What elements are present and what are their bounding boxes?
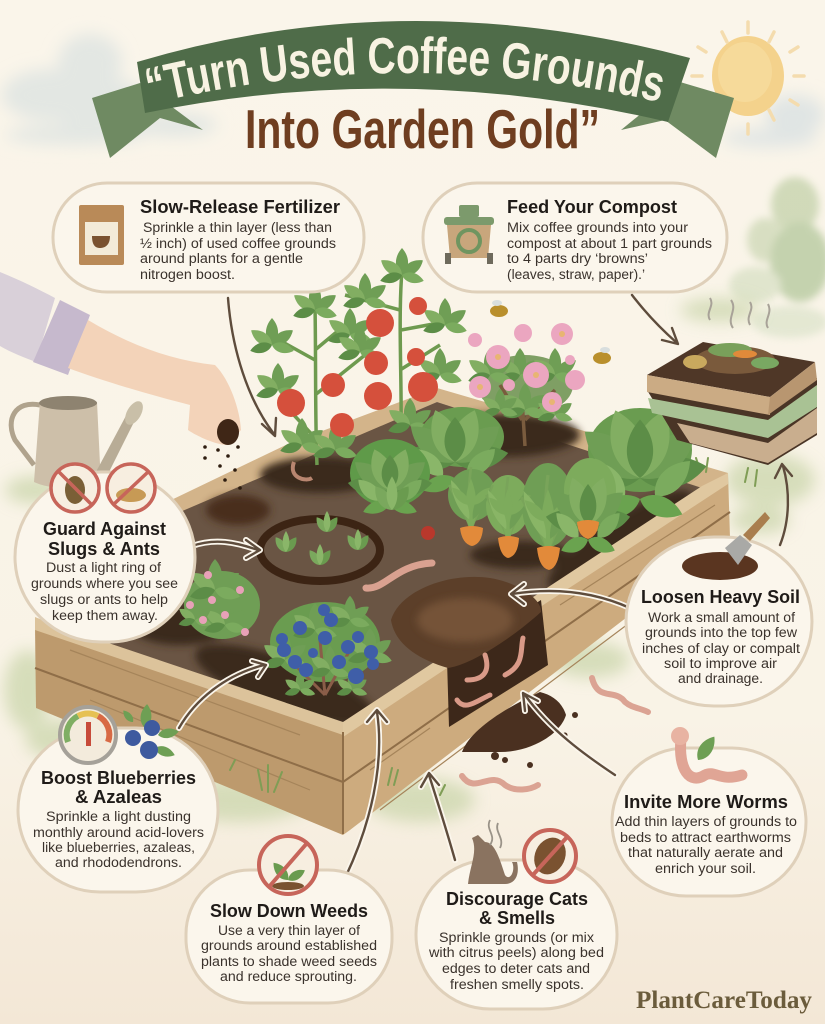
heading: [43, 518, 166, 559]
body text: Dust a light ring of: [46, 560, 161, 575]
blueberry bush: [261, 596, 394, 697]
lettuce: [400, 406, 510, 497]
body text: Work a small amount of: [648, 610, 795, 625]
arrow: loosen: [511, 584, 630, 608]
body text: Add thin layers of grounds to: [615, 814, 797, 829]
compost steam: [709, 298, 769, 328]
tomato plants: [248, 248, 469, 465]
heading: Boost Blueberries: [41, 767, 196, 788]
body text: [201, 923, 377, 984]
body text: compost at about 1 part grounds: [507, 236, 712, 251]
heading: & Smells: [479, 907, 555, 928]
grounds pile: [206, 495, 270, 525]
icon: leaf: [693, 733, 720, 764]
plank lines: [35, 512, 730, 834]
panel: guard against slugs: [15, 464, 195, 642]
basil: [346, 439, 434, 518]
body text: beds to attract earthworms: [620, 830, 791, 845]
arrow: compost from loosen: [775, 464, 792, 545]
body text: [642, 610, 800, 686]
body text: Sprinkle a light dusting: [46, 809, 191, 824]
icon: thermometer gauge: [60, 707, 116, 763]
panel: loosen heavy soil: [626, 512, 812, 706]
grass tufts: [70, 458, 757, 795]
spilled grounds: [462, 692, 566, 752]
body text: Sprinkle grounds (or mix: [439, 930, 594, 945]
body text: grounds around established: [201, 938, 377, 953]
bee top: [490, 300, 508, 317]
body text: Mix coffee grounds into your: [507, 220, 689, 235]
right wall: [343, 473, 730, 835]
icon: smiling worm: [671, 727, 742, 778]
spilled crumbs: [491, 712, 578, 768]
body text: (leaves, straw, paper).’: [507, 267, 645, 282]
title line 1: “Turn Used Coffee Grounds: [146, 36, 663, 101]
icon: cat: [468, 835, 518, 884]
panel: boost blueberries: [18, 704, 218, 892]
body text: [33, 809, 204, 870]
body text: grounds where you see: [31, 576, 178, 591]
crate shadow: [647, 378, 817, 465]
heading: [446, 888, 588, 928]
body text: slugs or ants to help: [40, 592, 168, 607]
heading: Slugs & Ants: [48, 538, 160, 559]
clouds right: [722, 95, 825, 147]
logo: PlantCareToday: [636, 987, 812, 1014]
body text: [615, 814, 797, 876]
banner right tail: [621, 82, 734, 158]
body text: monthly around acid-lovers: [33, 825, 204, 840]
heading: Invite More Worms: [624, 791, 788, 812]
loose worm: [366, 563, 432, 588]
sun: [692, 22, 804, 134]
left wall rim: [35, 617, 343, 735]
body text: [507, 220, 712, 282]
soil: [50, 402, 702, 722]
body text: and rhododendrons.: [55, 855, 182, 870]
top crate side: [768, 362, 817, 415]
body text: edges to deter cats and: [442, 961, 590, 976]
worm lower: [462, 776, 538, 790]
body text: freshen smelly spots.: [450, 977, 584, 992]
worm back: [293, 462, 312, 479]
body text: [31, 560, 178, 623]
mound texture: [417, 598, 513, 642]
body text: keep them away.: [52, 608, 158, 623]
arrow: weeds: [346, 710, 387, 876]
body text: Use a very thin layer of: [218, 923, 360, 938]
body text: [428, 930, 604, 992]
body text: like blueberries, azaleas,: [42, 840, 195, 855]
cuff: [33, 300, 90, 375]
seedling ring: [260, 511, 380, 581]
sleeve: [0, 272, 55, 362]
panel: feed your compost: [423, 183, 727, 292]
icon: compost bin: [444, 205, 494, 264]
wood grain: [70, 505, 715, 810]
title line 2: Into Garden Gold”: [245, 98, 600, 160]
heading: Slow Down Weeds: [210, 900, 368, 921]
heading: Slow-Release Fertilizer: [140, 196, 340, 217]
body text: around plants for a gentle: [140, 251, 303, 266]
panel: invite more worms: [612, 727, 806, 896]
spinach: [571, 405, 709, 524]
heading: Feed Your Compost: [507, 196, 677, 217]
icon: coffee bag: [79, 205, 124, 265]
clouds left: [2, 34, 217, 145]
body text: ½ inch) of used coffee grounds: [140, 236, 336, 251]
soil dark areas: [130, 413, 703, 742]
body text: inches of clay or compalt: [642, 641, 800, 656]
soil cutaway section: [447, 600, 548, 727]
heading: Loosen Heavy Soil: [641, 586, 800, 607]
icon: no beetle: [51, 464, 99, 512]
body text: and drainage.: [678, 671, 763, 686]
arrow: guard: [192, 540, 260, 558]
icon: trowel and soil: [682, 512, 770, 580]
cutaway mound: [391, 577, 541, 668]
heading: [41, 767, 196, 807]
bed back rim: [165, 388, 728, 516]
body text: Sprinkle a thin layer (less than: [143, 220, 332, 235]
body text: that naturally aerate and: [628, 845, 783, 860]
body text: plants to shade weed seeds: [201, 954, 377, 969]
banner left tail: [92, 83, 203, 158]
worm right: [592, 678, 648, 712]
banner main ribbon: [137, 21, 690, 122]
body text: [140, 220, 336, 282]
panel: discourage cats: [416, 820, 617, 1009]
title banner: [92, 21, 734, 160]
tomatoes: [277, 297, 438, 437]
arrow: feed compost: [632, 295, 678, 344]
ladybug: [421, 526, 435, 540]
top crate front: [647, 375, 770, 415]
compost bin: [647, 298, 817, 465]
body text: with citrus peels) along bed: [428, 945, 604, 960]
compost inside: [647, 342, 815, 397]
arrow: boost: [179, 661, 266, 728]
panel: slow down weeds: [186, 836, 392, 1003]
arrow: worms: [523, 693, 615, 775]
green crate: [648, 385, 817, 438]
icon: no slug: [107, 464, 155, 512]
azalea plant: [177, 559, 260, 639]
bee lower: [593, 347, 611, 364]
carrots: [447, 458, 632, 570]
heading: Guard Against: [43, 518, 166, 539]
right wall rim: [343, 473, 728, 737]
body text: enrich your soil.: [655, 861, 756, 876]
heading: & Azaleas: [75, 786, 162, 807]
body text: to 4 parts dry ‘browns’: [507, 251, 648, 266]
trees right: [729, 177, 825, 338]
panel: slow-release fertilizer: [53, 183, 364, 292]
bottom crate: [677, 408, 817, 463]
falling grounds: [203, 445, 242, 490]
arrow: slow-release: [228, 298, 276, 436]
worms in cutaway: [457, 638, 523, 705]
icon: no weeds: [259, 836, 317, 894]
left wall: [35, 627, 343, 835]
body text: and reduce sprouting.: [220, 969, 357, 984]
body text: nitrogen boost.: [140, 267, 235, 282]
icon: no coffee bean: [524, 830, 576, 882]
ground wash: [4, 298, 815, 822]
arm: [68, 320, 241, 445]
body text: soil to improve air: [664, 656, 778, 671]
heading: Discourage Cats: [446, 888, 588, 909]
arrow: cats: [421, 773, 455, 860]
body text: grounds into the top few: [645, 625, 797, 640]
flower bush: [466, 323, 585, 446]
raised bed: [35, 388, 757, 835]
hand: [0, 272, 241, 445]
icon: blueberry sprig: [121, 704, 180, 760]
smell lines: [489, 820, 501, 848]
watering can: [11, 396, 147, 490]
